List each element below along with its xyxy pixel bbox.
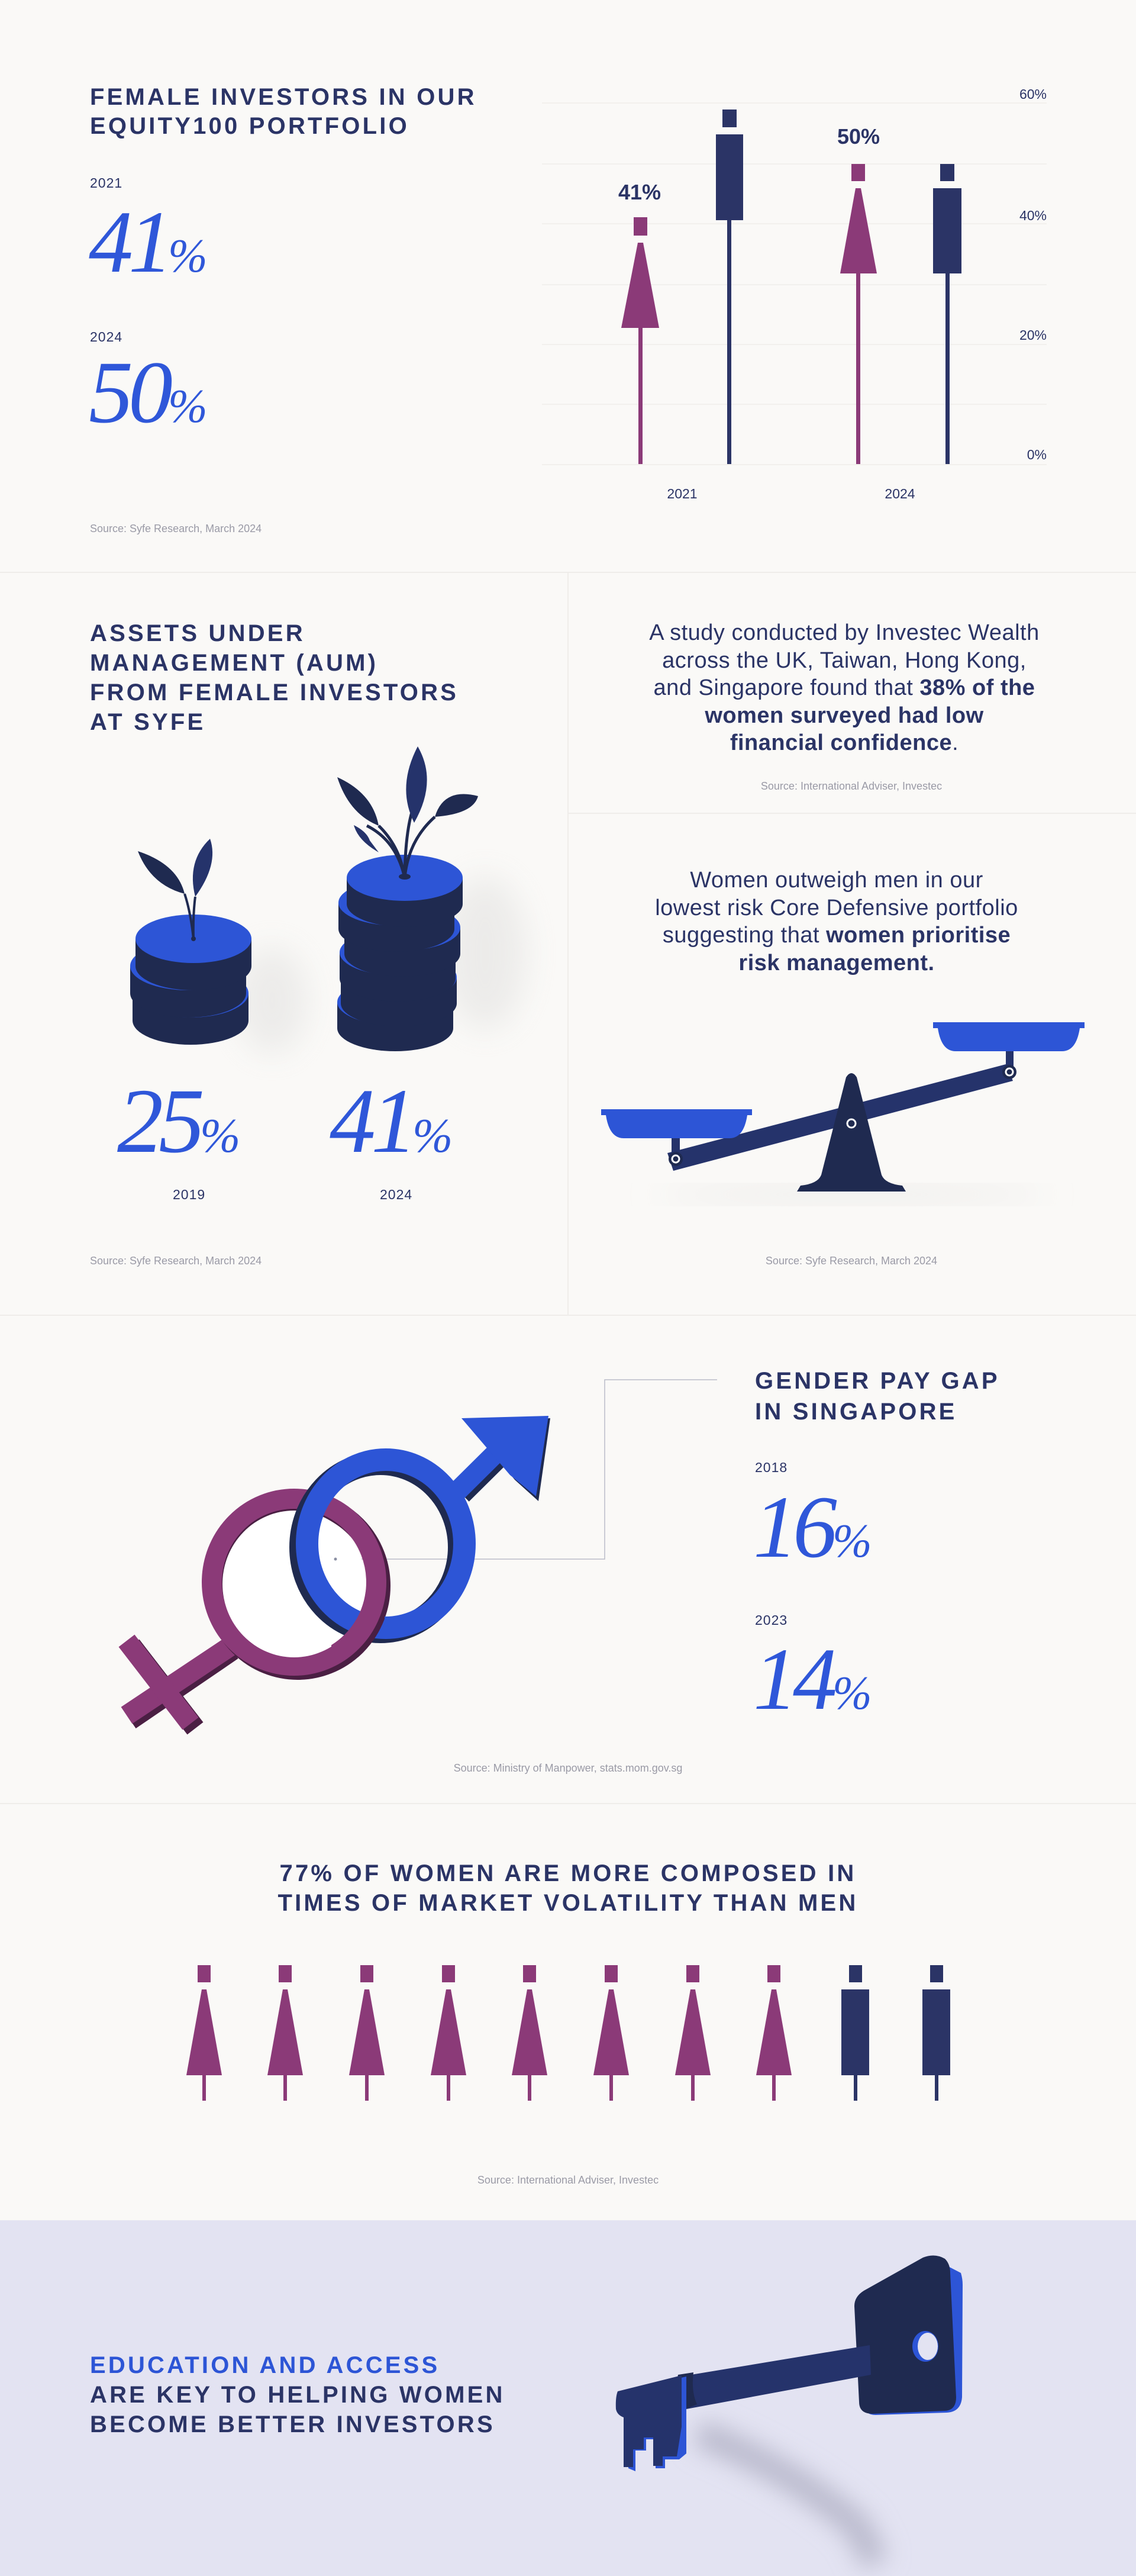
text block: financial confidence. (730, 730, 958, 755)
headline: ARE KEY TO HELPING WOMEN (90, 2382, 505, 2408)
title: ASSETS UNDER (90, 620, 305, 646)
text block: women surveyed had low (705, 703, 984, 728)
title (90, 84, 477, 139)
title: GENDER PAY GAP (755, 1368, 1000, 1394)
stat 16%: 16% (753, 1478, 872, 1576)
title (277, 1860, 859, 1916)
label 2021: 2021 (90, 175, 122, 191)
source: Source: International Adviser, Investec (761, 780, 942, 792)
text block: A study conducted by Investec Wealth (649, 620, 1040, 645)
section: education and access (0, 2220, 1136, 2576)
label 2023: 2023 (755, 1612, 788, 1628)
title: FROM FEMALE INVESTORS (90, 680, 459, 706)
text block (655, 868, 1018, 975)
pictogram: 8 women 2 men (186, 1965, 950, 2101)
headline (90, 2352, 505, 2437)
section: gender pay gap (0, 1315, 1136, 1804)
left stack (130, 839, 251, 1045)
chart (542, 86, 1047, 501)
stat 41% 2024: 41% (330, 1070, 453, 1172)
stat 14%: 14% (753, 1630, 872, 1728)
text block: risk management. (738, 951, 935, 975)
stat 41%: 41% (89, 193, 208, 291)
title (90, 620, 459, 735)
text block: and Singapore found that 38% of the (654, 675, 1035, 700)
section: market volatility (186, 1860, 950, 2186)
section: female investors (89, 84, 1047, 534)
source: Source: Syfe Research, March 2024 (90, 523, 262, 534)
headline: EDUCATION AND ACCESS (90, 2352, 440, 2378)
source: Source: Syfe Research, March 2024 (766, 1255, 937, 1267)
chart: 40% (1019, 208, 1047, 223)
panel: financial confidence (569, 572, 1136, 814)
right stack (337, 746, 478, 1051)
label 2024: 2024 (90, 329, 122, 344)
section: AUM (0, 572, 569, 1315)
text block: across the UK, Taiwan, Hong Kong, (662, 648, 1027, 672)
label 2024: 2024 (380, 1187, 412, 1202)
source: Source: International Adviser, Investec (477, 2174, 659, 2186)
title: AT SYFE (90, 709, 205, 735)
chart: 2021 (667, 486, 698, 501)
female (127, 1499, 380, 1728)
male (301, 1416, 550, 1631)
title: 77% OF WOMEN ARE MORE COMPOSED IN (280, 1860, 856, 1886)
stat 25%: 25% (117, 1070, 240, 1172)
chart: 20% (1019, 327, 1047, 343)
label 2018: 2018 (755, 1460, 788, 1475)
source: Source: Syfe Research, March 2024 (90, 1255, 262, 1267)
panel: risk management (655, 868, 1018, 1267)
chart: 2024 (885, 486, 915, 501)
text block: lowest risk Core Defensive portfolio (655, 895, 1018, 920)
text block: suggesting that women prioritise (663, 923, 1011, 948)
title: TIMES OF MARKET VOLATILITY THAN MEN (277, 1890, 859, 1916)
source: Source: Ministry of Manpower, stats.mom.gov.sg (454, 1762, 682, 1774)
text block (649, 620, 1040, 755)
label 2019: 2019 (173, 1187, 205, 1202)
title: IN SINGAPORE (755, 1399, 957, 1425)
headline: BECOME BETTER INVESTORS (90, 2411, 495, 2437)
title: FEMALE INVESTORS IN OUR (90, 84, 477, 110)
chart: 60% (1019, 86, 1047, 102)
text block: Women outweigh men in our (690, 868, 983, 893)
title (755, 1368, 1000, 1425)
title: EQUITY100 PORTFOLIO (90, 113, 409, 139)
chart: 50% (837, 124, 880, 149)
icon: interlocked gender symbols (118, 1379, 717, 1734)
title: MANAGEMENT (AUM) (90, 650, 378, 676)
stat 50%: 50% (89, 343, 208, 442)
chart: 41% (618, 180, 661, 204)
chart: 0% (1027, 447, 1047, 462)
